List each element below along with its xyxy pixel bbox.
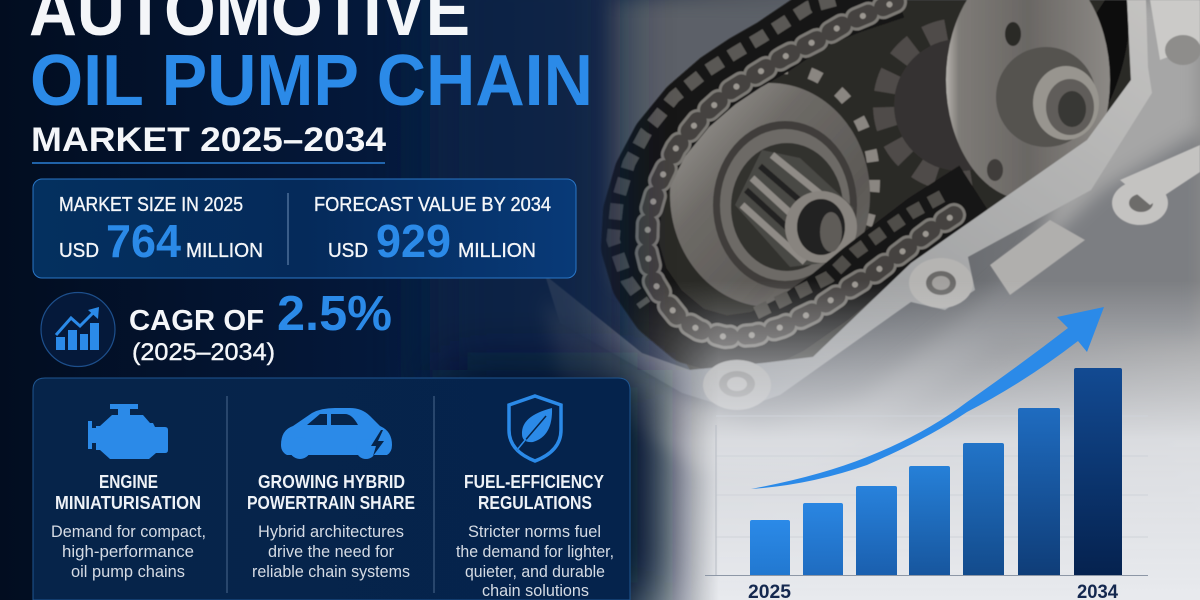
CAGR text: CAGR OF xyxy=(129,305,264,337)
CAGR text: (2025–2034) xyxy=(132,339,275,366)
aluminium flange xyxy=(545,0,1200,410)
driver text: high-performance xyxy=(62,543,194,561)
market size 2025: 764 xyxy=(106,215,181,267)
driver: hybrid powertrain xyxy=(247,408,415,581)
rear sprocket xyxy=(888,33,1032,177)
icon: engine xyxy=(88,404,168,459)
driver text: REGULATIONS xyxy=(478,492,592,513)
main sprocket xyxy=(670,68,874,307)
driver text xyxy=(247,471,415,581)
driver text: Stricter norms fuel xyxy=(468,523,601,541)
icon: hybrid car xyxy=(281,408,392,459)
title: MARKET 2025–2034 xyxy=(31,121,386,159)
bars xyxy=(750,368,1122,575)
panel: market size and forecast xyxy=(33,179,576,278)
icon: shield with leaf xyxy=(509,396,561,461)
blue tint and fog overlays xyxy=(430,0,1200,600)
driver text: reliable chain systems xyxy=(252,563,410,581)
market size 2025: USD xyxy=(59,240,99,262)
cavity shadow xyxy=(640,0,1131,370)
forecast value 2034: FORECAST VALUE BY 2034 xyxy=(314,194,551,216)
title xyxy=(29,0,593,163)
market size 2025 xyxy=(59,194,263,267)
market size 2025: MILLION xyxy=(186,240,263,262)
driver text: the demand for lighter, xyxy=(456,543,614,561)
icon: rising bars in circle xyxy=(41,292,115,366)
driver text: drive the need for xyxy=(268,543,394,561)
forecast value 2034: MILLION xyxy=(458,240,536,262)
forecast value 2034: 929 xyxy=(376,215,451,267)
chain xyxy=(613,0,975,345)
forecast value 2034: USD xyxy=(328,240,368,262)
engine photo: timing chain and sprockets xyxy=(545,0,1200,410)
driver text xyxy=(456,471,614,600)
forecast value 2034 xyxy=(314,194,551,267)
driver text: chain solutions xyxy=(482,582,589,600)
driver text: MINIATURISATION xyxy=(55,492,201,513)
driver text xyxy=(51,471,206,581)
CAGR text: 2.5% xyxy=(277,287,392,341)
driver: engine miniaturisation xyxy=(51,404,206,581)
title: OIL PUMP CHAIN xyxy=(30,41,593,121)
driver text: FUEL-EFFICIENCY xyxy=(464,471,605,492)
driver text: Demand for compact, xyxy=(51,523,206,541)
hub with splines xyxy=(735,150,857,267)
driver text: oil pump chains xyxy=(71,563,185,581)
driver text: ENGINE xyxy=(99,471,158,492)
driver: fuel efficiency xyxy=(456,396,614,600)
bar chart xyxy=(705,307,1148,600)
driver text: POWERTRAIN SHARE xyxy=(247,492,415,513)
CAGR text xyxy=(129,287,392,366)
panel: market drivers xyxy=(33,378,630,600)
axis labels xyxy=(748,582,1118,600)
right disc xyxy=(946,0,1110,200)
driver text: GROWING HYBRID xyxy=(258,471,405,492)
black arc behind the right disc xyxy=(1040,0,1129,175)
driver text: Hybrid architectures xyxy=(258,523,404,541)
driver text: quieter, and durable xyxy=(465,563,605,581)
market size 2025: MARKET SIZE IN 2025 xyxy=(59,194,243,216)
growth arrow xyxy=(751,307,1104,489)
